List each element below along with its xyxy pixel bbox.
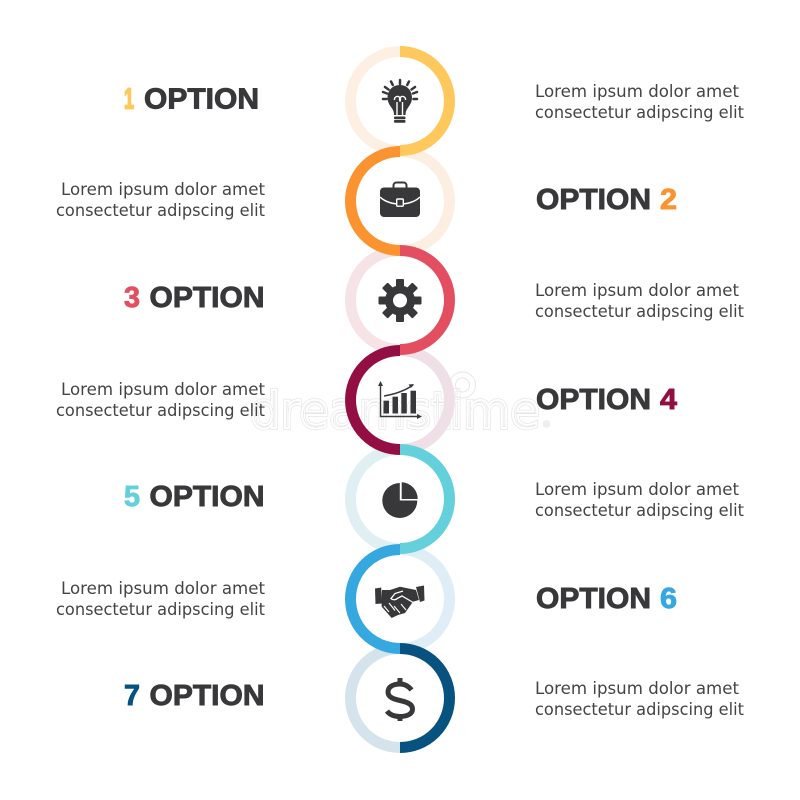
icon: gear bbox=[378, 279, 422, 322]
option 1 heading: 1 bbox=[124, 84, 134, 116]
watermark: dreamstime bbox=[250, 382, 540, 440]
option 2 text bbox=[56, 180, 265, 221]
ring colored arcs bbox=[350, 52, 449, 748]
option 7 text: Lorem ipsum dolor amet bbox=[535, 679, 739, 699]
option 4 text bbox=[56, 380, 265, 421]
ring pale arcs bbox=[350, 52, 449, 748]
option 4 heading: OPTION bbox=[536, 384, 651, 416]
option 1 text bbox=[535, 82, 744, 123]
option 6 text bbox=[56, 579, 265, 620]
option 4 text: Lorem ipsum dolor amet bbox=[61, 380, 265, 400]
option 7 heading: OPTION bbox=[150, 680, 264, 712]
watermark: dreamstime bbox=[250, 382, 540, 440]
icon: briefcase bbox=[380, 182, 420, 217]
option 7 text bbox=[535, 679, 744, 720]
option 6 heading: 6 bbox=[660, 583, 677, 615]
option 5 heading: OPTION bbox=[150, 481, 264, 513]
icon: pie chart bbox=[382, 482, 418, 518]
option 5 text: consectetur adipscing elit bbox=[535, 501, 744, 521]
icon: light bulb bbox=[383, 80, 417, 123]
option 2 heading: 2 bbox=[660, 184, 677, 216]
option 3 text bbox=[535, 281, 744, 322]
option 3 heading: 3 bbox=[124, 282, 140, 314]
icon: handshake bbox=[375, 586, 424, 618]
option 5 text: Lorem ipsum dolor amet bbox=[535, 480, 739, 500]
option 1 text: consectetur adipscing elit bbox=[535, 103, 744, 123]
option 3 text: Lorem ipsum dolor amet bbox=[535, 281, 739, 301]
option 7 heading: 7 bbox=[124, 680, 140, 712]
option 3 text: consectetur adipscing elit bbox=[535, 302, 744, 322]
option 2 text: Lorem ipsum dolor amet bbox=[61, 180, 265, 200]
option 5 text bbox=[535, 480, 744, 521]
option 2 text: consectetur adipscing elit bbox=[56, 201, 265, 221]
option 3 heading: OPTION bbox=[150, 282, 264, 314]
option 5 heading: 5 bbox=[124, 481, 140, 513]
option 4 heading: 4 bbox=[660, 384, 677, 416]
ring chain bbox=[350, 52, 449, 748]
option 6 text: Lorem ipsum dolor amet bbox=[61, 579, 265, 599]
icon: dollar sign bbox=[387, 678, 412, 721]
option 6 text: consectetur adipscing elit bbox=[56, 600, 265, 620]
icon: bar chart bbox=[378, 381, 422, 419]
option 4 text: consectetur adipscing elit bbox=[56, 401, 265, 421]
option 1 text: Lorem ipsum dolor amet bbox=[535, 82, 739, 102]
option 6 heading: OPTION bbox=[536, 583, 651, 615]
option 2 heading: OPTION bbox=[536, 184, 651, 216]
option 7 text: consectetur adipscing elit bbox=[535, 700, 744, 720]
option 1 heading: OPTION bbox=[144, 84, 259, 116]
